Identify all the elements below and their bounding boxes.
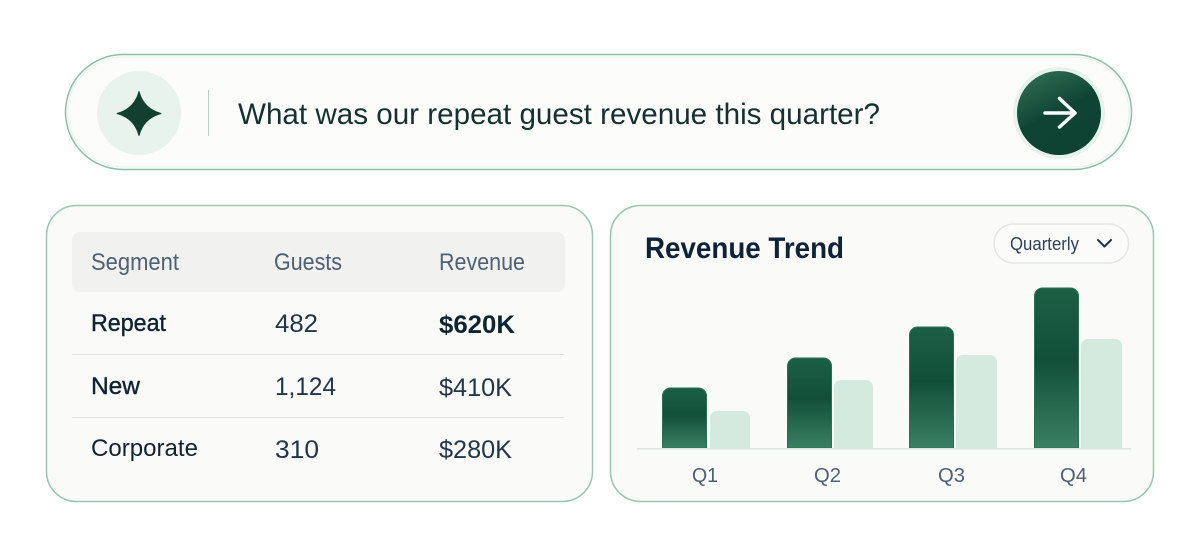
row: Corporate: $280K xyxy=(439,436,512,464)
icon: arrow xyxy=(1045,98,1075,127)
row: Repeat xyxy=(91,310,515,339)
row: Corporate: Corporate xyxy=(91,435,198,462)
send button xyxy=(1013,67,1105,159)
dropdown: Quarterly: Quarterly xyxy=(1010,234,1079,254)
table header row: Segment xyxy=(91,249,179,276)
panel: table xyxy=(46,206,592,502)
bars: Q4 xyxy=(1034,288,1122,448)
icon: sparkle xyxy=(97,71,181,155)
row: Repeat: 482 xyxy=(275,310,318,338)
row: New: 1,124 xyxy=(275,373,336,401)
table header row: Revenue xyxy=(439,249,525,276)
bars: Q3 xyxy=(910,327,997,448)
panel: revenue trend xyxy=(610,206,1154,502)
row: Corporate xyxy=(91,435,512,464)
question text: What was our repeat guest revenue this quarter? xyxy=(238,98,880,131)
axis labels: Q1 xyxy=(692,465,718,487)
bar chart xyxy=(637,288,1131,487)
row: New: New xyxy=(91,373,141,400)
row: Repeat: $620K xyxy=(439,311,515,339)
chart title: Revenue Trend xyxy=(645,232,844,265)
row: New xyxy=(91,373,512,402)
row: New: $410K xyxy=(439,374,512,402)
divider xyxy=(208,90,209,136)
table header row xyxy=(72,232,565,292)
axis labels xyxy=(692,465,1087,487)
table header row: Guests xyxy=(274,249,342,276)
bars: Q1 xyxy=(662,388,750,448)
row: Repeat: Repeat xyxy=(91,310,166,337)
row: Corporate: 310 xyxy=(275,436,319,464)
axis labels: Q2 xyxy=(814,465,841,487)
axis labels: Q4 xyxy=(1060,465,1087,487)
axis labels: Q3 xyxy=(938,465,965,487)
dropdown: Quarterly xyxy=(994,224,1128,263)
bars: Q2 xyxy=(788,358,873,448)
search bar xyxy=(66,54,1132,170)
